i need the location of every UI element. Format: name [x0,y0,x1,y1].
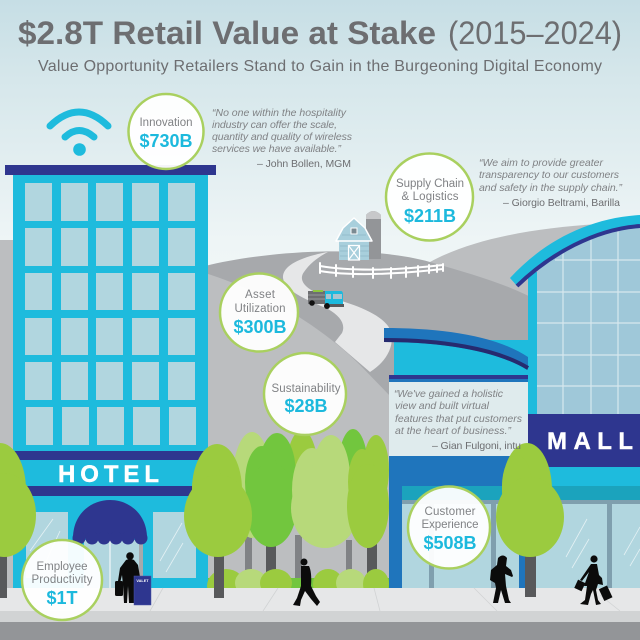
subtitle: Value Opportunity Retailers Stand to Gain in the Burgeoning Digital Economy [38,58,602,75]
tree near hotel [184,444,252,598]
mall building [384,215,640,588]
delivery truck [308,290,344,309]
hotel building [5,165,216,588]
mall arched roof [510,215,640,287]
icon: wifi [50,112,108,156]
quote: Giorgio Beltrami: – Giorgio Beltrami, Barilla [503,197,620,209]
title: $2.8T Retail Value at Stake [18,15,436,51]
person: valet with luggage [115,552,140,603]
callout: Supply Chain and Logistics [386,154,473,240]
sidewalk and road [0,588,640,640]
callout: Employee Productivity: Employee [36,561,88,573]
hotel entrance [26,500,196,588]
person: walking woman [490,556,513,603]
tree near mall [496,443,564,597]
sky background [0,0,640,320]
bushes [207,569,389,603]
hotel windows [25,183,196,445]
callout: Asset Utilization: $300B [233,317,287,337]
quote: Gian Fulgoni: “We've gained a holistic [394,388,504,400]
callout: Employee Productivity: $1T [46,588,78,608]
callout: Employee Productivity: Productivity [32,574,93,586]
quote: John Bollen: – John Bollen, MGM [257,158,351,170]
callout: Supply Chain and Logistics: $211B [404,206,456,226]
callout: Innovation [128,94,204,169]
quote: John Bollen: quantity and quality of wireless [212,131,353,143]
callout: Sustainability: Sustainability [272,383,341,395]
hotel sign band [13,451,212,496]
tree left edge [0,443,36,598]
quote: Giorgio Beltrami: transparency to our customers [479,169,620,181]
callout: Innovation: Innovation [140,117,192,129]
callout: Customer Experience: Customer [424,506,476,518]
quote: Gian Fulgoni: view and built virtual [395,400,490,412]
landscape hills and road [0,224,640,600]
hotel roof [5,165,216,175]
callout: Supply Chain and Logistics: Supply Chain [396,178,464,190]
mall sign: MALL [547,428,633,455]
valet stand: VALET [136,579,149,583]
quote: Gian Fulgoni: features that put customers [395,413,523,425]
callout: Customer Experience: $508B [423,533,477,553]
callout: Employee Productivity [22,540,102,620]
quote: Gian Fulgoni: – Gian Fulgoni, intu [432,440,521,452]
background trees [232,429,389,588]
callout: Asset Utilization: Asset [245,289,276,301]
callout: Sustainability: $28B [284,396,328,416]
quote: John Bollen: “No one within the hospitality [212,107,347,119]
title [18,15,622,51]
callout: Asset Utilization [220,274,298,352]
callout: Innovation: $730B [139,131,193,151]
barn and silo [336,211,381,260]
left wing arched roof [384,328,528,370]
mall sign [528,414,640,467]
hotel sign band: HOTEL [58,461,159,488]
person: walking man [293,558,320,606]
white fence [320,263,443,278]
quote: Gian Fulgoni: at the heart of business.” [395,425,512,437]
valet stand [134,576,151,605]
mall shop windows [402,504,640,588]
callout: Sustainability [264,353,346,435]
quote: John Bollen [212,107,353,170]
quote: Giorgio Beltrami [479,157,622,209]
quote: John Bollen: services we have available.” [212,143,342,155]
quote: Giorgio Beltrami: and safety in the supply chain.” [479,182,622,194]
callout: Asset Utilization: Utilization [234,303,286,315]
quote: Giorgio Beltrami: “We aim to provide greater [479,157,604,169]
callout: Customer Experience: Experience [422,519,478,531]
person: shopper with bags [574,555,612,605]
callout: Supply Chain and Logistics: & Logistics [402,191,459,203]
callout: Customer Experience [408,486,490,568]
quote: Gian Fulgoni [394,388,523,452]
quote: John Bollen: industry can offer the scale, [212,119,337,131]
title: (2015–2024) [448,15,622,51]
